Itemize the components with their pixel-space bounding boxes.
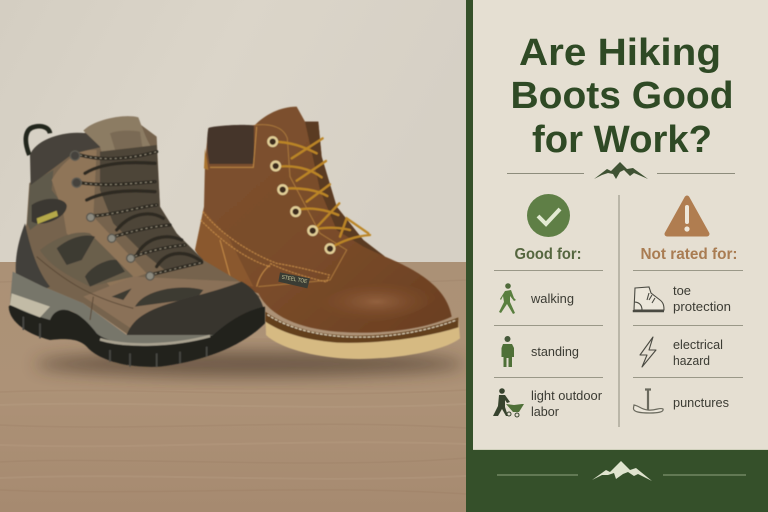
text: light outdoor labor: light outdoor: [531, 388, 603, 403]
title: Are Hiking: [519, 32, 721, 74]
text: electrical hazard: hazard: [673, 353, 710, 368]
leather upper: [195, 107, 452, 333]
ankle patch and label: [32, 199, 67, 224]
text: light outdoor labor: [531, 388, 603, 419]
panel: green edge band: [466, 0, 473, 512]
text: light outdoor labor: labor: [531, 404, 560, 419]
icon: nail through sole: [633, 390, 663, 413]
row dividers: [494, 270, 743, 378]
panel: green footer: [473, 449, 768, 512]
shadow under boots: [35, 351, 465, 377]
text: electrical hazard: [673, 337, 723, 368]
rubber outsole: [9, 293, 265, 367]
tongue: [83, 116, 157, 203]
dark collar: [30, 133, 103, 185]
text: walking: walking: [530, 291, 574, 306]
footer divider lines: [497, 474, 746, 476]
text: toe protection: [673, 283, 731, 314]
metal eyelets: [70, 151, 81, 187]
dark padded collar: [207, 125, 254, 164]
text: toe protection: protection: [673, 299, 731, 314]
icon: lightning bolt outline: [640, 337, 656, 367]
text: standing: standing: [531, 344, 579, 359]
pull loop: [26, 126, 50, 155]
photo: brown steel toe work boot: [195, 107, 460, 359]
icon: green check circle: [527, 194, 570, 237]
text: electrical hazard: electrical: [673, 337, 723, 352]
steel toe tag: [278, 272, 310, 288]
mesh panels: [57, 235, 203, 307]
dark lacing underlay: [100, 145, 203, 272]
photo background: wall and wooden floor: [0, 0, 466, 512]
panel: cream information panel: [473, 0, 768, 450]
title: for Work?: [532, 119, 712, 161]
laces: [80, 152, 202, 275]
heading: good for: Good for:: [514, 246, 582, 263]
icon: boot outline: [634, 287, 664, 311]
midsole: [10, 272, 213, 345]
side foxing stitching: [37, 257, 133, 320]
laces: [273, 138, 370, 248]
title: [510, 32, 734, 161]
steel toe tag: STEEL TOE: [281, 275, 308, 285]
title: Boots Good: [510, 75, 734, 117]
photo: brown and grey hiking boot: [9, 116, 265, 367]
tongue and eyestay: [305, 122, 385, 257]
icon: footer mountains: [592, 461, 652, 481]
suede upper: [17, 117, 260, 338]
column divider: [618, 195, 620, 427]
heading: not rated for: Not rated for:: [640, 246, 738, 263]
tan suede eyestay: [52, 150, 147, 287]
icon: warning triangle: [667, 198, 707, 234]
text: toe protection: toe: [673, 283, 691, 298]
icon: standing person: [502, 336, 514, 367]
rubber toe cap: [127, 282, 265, 335]
wedge sole: [265, 312, 460, 359]
dark heel panel: [16, 223, 50, 290]
text: punctures: punctures: [673, 395, 729, 410]
icon: person with wheelbarrow: [493, 388, 524, 417]
icon: walking person: [499, 283, 516, 314]
grey ankle panel: [27, 170, 63, 230]
title divider with mountain icon: [507, 162, 735, 179]
brass eyelets: [268, 137, 334, 253]
